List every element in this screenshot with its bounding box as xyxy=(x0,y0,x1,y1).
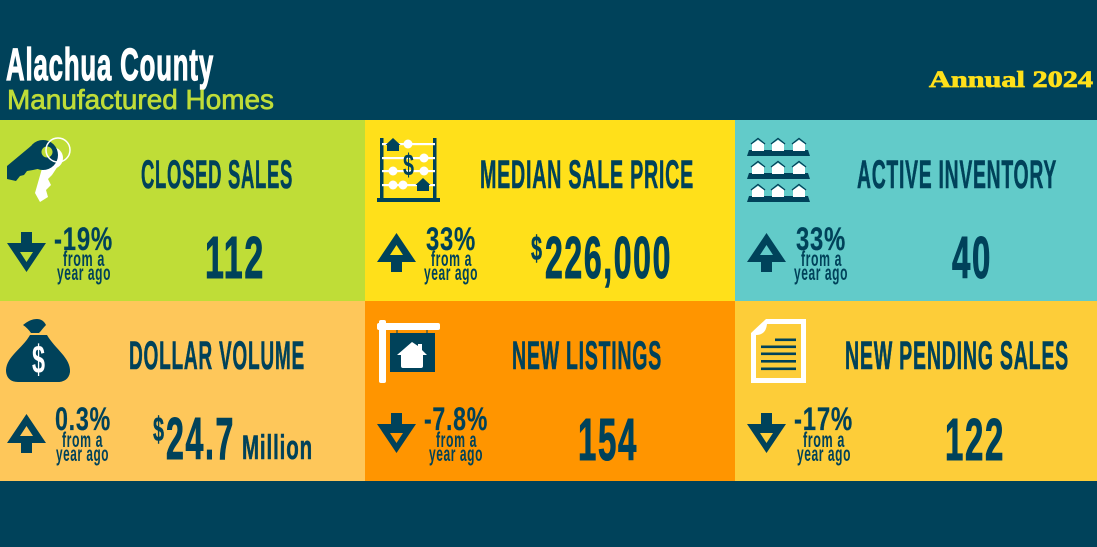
icon: up arrow xyxy=(747,233,786,272)
panel: dollar volume xyxy=(0,301,365,481)
icon: down arrow xyxy=(377,413,416,453)
subtitle: Manufactured Homes xyxy=(7,84,274,115)
header xyxy=(6,39,1094,115)
icon: abacus: $ xyxy=(403,147,414,182)
period label: Annual 2024 xyxy=(929,67,1094,92)
change xyxy=(424,221,478,285)
panel: new pending sales xyxy=(735,301,1097,481)
change: 33% xyxy=(426,221,476,257)
change: year ago xyxy=(57,262,111,285)
change: -7.8% xyxy=(424,401,488,437)
change: -19% xyxy=(54,221,113,257)
icon: keys xyxy=(7,138,70,202)
change xyxy=(424,401,488,466)
icon: money bag: $ xyxy=(32,338,45,382)
panel: new listings: NEW LISTINGS xyxy=(512,334,662,378)
value: $ xyxy=(531,230,542,268)
change: from a xyxy=(801,248,842,271)
icon: money bag xyxy=(6,319,70,382)
panel: dollar volume: DOLLAR VOLUME xyxy=(129,334,305,378)
change: from a xyxy=(62,429,103,452)
change: year ago xyxy=(56,443,109,466)
panel: new listings xyxy=(365,301,735,481)
title: Alachua County xyxy=(6,39,214,90)
icon: document xyxy=(751,319,806,383)
change: from a xyxy=(431,248,472,271)
change: from a xyxy=(63,248,105,271)
change: from a xyxy=(436,429,477,452)
change: year ago xyxy=(424,262,478,285)
value: 154 xyxy=(578,407,638,473)
icon: up arrow xyxy=(377,233,416,272)
value: $ xyxy=(153,411,164,449)
icon: abacus xyxy=(377,138,440,202)
change: from a xyxy=(803,429,845,452)
icon: rows of houses xyxy=(747,138,810,202)
change: 33% xyxy=(796,221,846,257)
panel: median sale price xyxy=(365,120,735,301)
value: 122 xyxy=(945,407,1005,473)
value: 24.7 xyxy=(166,406,235,472)
change xyxy=(55,401,111,466)
icon: down arrow xyxy=(7,232,46,272)
change: year ago xyxy=(794,262,848,285)
panel: closed sales xyxy=(0,120,365,301)
panel: closed sales: CLOSED SALES xyxy=(141,153,293,197)
change: year ago xyxy=(429,443,483,466)
value: 226,000 xyxy=(545,225,672,291)
value xyxy=(531,225,672,291)
change xyxy=(794,401,853,466)
value: Million xyxy=(242,429,313,467)
icon: down arrow xyxy=(747,413,786,453)
change xyxy=(54,221,113,285)
icon: up arrow xyxy=(7,414,46,453)
panel: active inventory xyxy=(735,120,1097,301)
change: 0.3% xyxy=(55,401,111,437)
change: -17% xyxy=(794,401,853,437)
value: 40 xyxy=(952,225,992,291)
panel: median sale price: MEDIAN SALE PRICE xyxy=(480,153,694,197)
icon: for sale sign xyxy=(377,320,440,383)
change: year ago xyxy=(797,443,851,466)
value: 112 xyxy=(205,225,265,291)
change xyxy=(794,221,848,285)
